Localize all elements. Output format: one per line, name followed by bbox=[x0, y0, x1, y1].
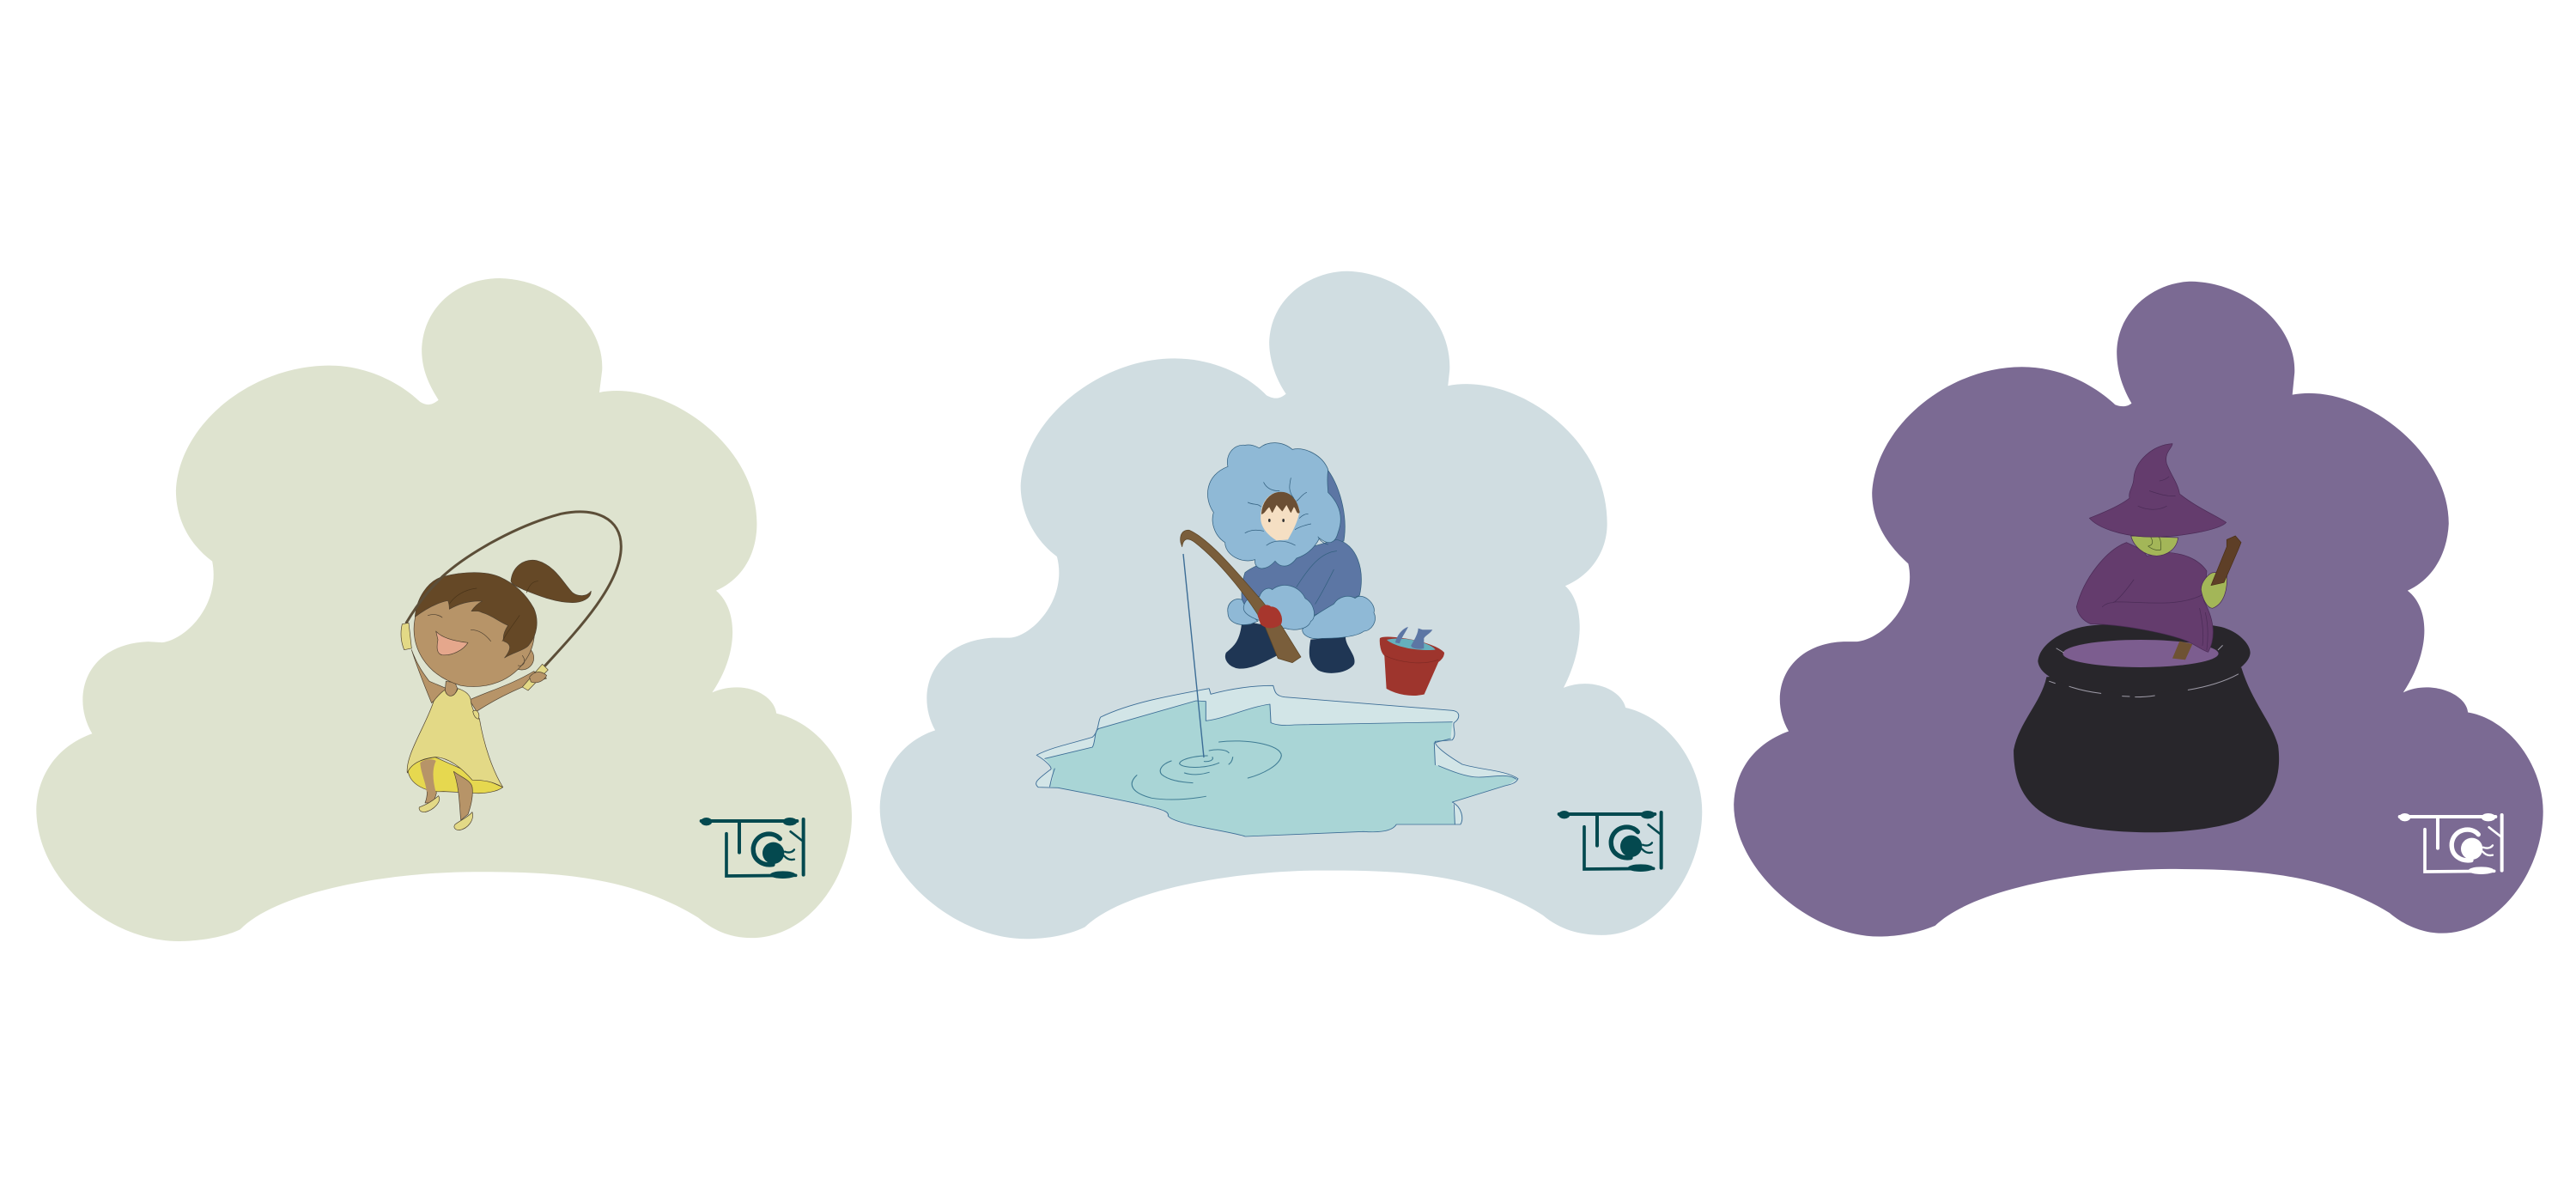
ice edge lines bbox=[1045, 701, 1516, 824]
dress lining bbox=[408, 757, 503, 794]
hand bbox=[2201, 573, 2227, 608]
coat creases bbox=[1297, 551, 1337, 604]
hair bbox=[415, 573, 537, 658]
ponytail bbox=[511, 560, 591, 603]
ice sheet bbox=[1036, 685, 1518, 836]
skipping rope bbox=[406, 512, 621, 666]
hat creases bbox=[2138, 477, 2175, 509]
sleeve fur bbox=[1243, 585, 1315, 629]
left leg bbox=[419, 758, 436, 803]
ice outline bbox=[1036, 685, 1518, 836]
water bbox=[1045, 701, 1516, 836]
ice hole and water bbox=[1036, 685, 1518, 836]
cloud background: purple bbox=[1734, 282, 2543, 937]
armhole bbox=[473, 710, 479, 719]
figure: fisher in parka bbox=[1181, 443, 1444, 696]
logo bbox=[2399, 813, 2502, 874]
bucket bbox=[1380, 637, 1444, 696]
right leg bbox=[453, 771, 472, 820]
robe bbox=[2076, 543, 2213, 652]
right arm bbox=[470, 672, 547, 711]
panel: girl skipping rope bbox=[36, 278, 852, 941]
bucket rim line bbox=[1385, 655, 1438, 663]
bucket water bbox=[1387, 638, 1436, 650]
closed eyes bbox=[428, 615, 525, 666]
head bbox=[414, 574, 535, 687]
hood fur bbox=[1207, 443, 1340, 569]
robe creases bbox=[2102, 580, 2208, 650]
shoes bbox=[419, 796, 473, 830]
panel: ice fishing bbox=[880, 271, 1702, 939]
fishing rod bbox=[1181, 530, 1301, 663]
left fur cuff bbox=[1228, 599, 1258, 625]
fur lines bbox=[1245, 478, 1328, 545]
left handle bbox=[401, 623, 411, 650]
neck bbox=[445, 681, 458, 696]
nose bbox=[2148, 537, 2161, 550]
ear bbox=[510, 646, 534, 670]
hair bbox=[1261, 492, 1299, 514]
dress bbox=[407, 689, 503, 788]
glove bbox=[1258, 605, 1282, 628]
cloud background: pale blue bbox=[880, 271, 1702, 939]
logo bbox=[701, 818, 804, 879]
hem fur bbox=[1303, 596, 1375, 639]
cauldron body bbox=[2014, 667, 2279, 832]
fishing line bbox=[1183, 554, 1204, 757]
cauldron rim bbox=[2038, 623, 2251, 693]
spoon shaft bbox=[2172, 642, 2192, 660]
boots bbox=[1225, 621, 1354, 672]
eyes bbox=[1268, 519, 1285, 522]
coat bbox=[1242, 539, 1361, 616]
face bbox=[1261, 492, 1299, 540]
cauldron highlights bbox=[2050, 646, 2239, 697]
figure: girl with skipping rope bbox=[401, 512, 621, 830]
hair lines bbox=[449, 581, 538, 642]
left leg front bbox=[420, 759, 436, 793]
face bbox=[2131, 536, 2178, 556]
cloud background: sage bbox=[36, 278, 852, 941]
panel: witch and cauldron bbox=[1734, 282, 2543, 937]
right hand bbox=[530, 672, 547, 683]
hood back bbox=[1325, 466, 1345, 544]
potion bbox=[2063, 640, 2219, 667]
mouth bbox=[436, 631, 468, 655]
left arm bbox=[411, 650, 447, 703]
ripples bbox=[1132, 741, 1281, 800]
right handle bbox=[522, 664, 548, 690]
figure: witch at cauldron bbox=[2038, 444, 2251, 693]
hat bbox=[2089, 444, 2227, 537]
logo bbox=[1558, 811, 1662, 872]
spoon handle bbox=[2211, 536, 2241, 586]
fish tails bbox=[1395, 627, 1432, 649]
